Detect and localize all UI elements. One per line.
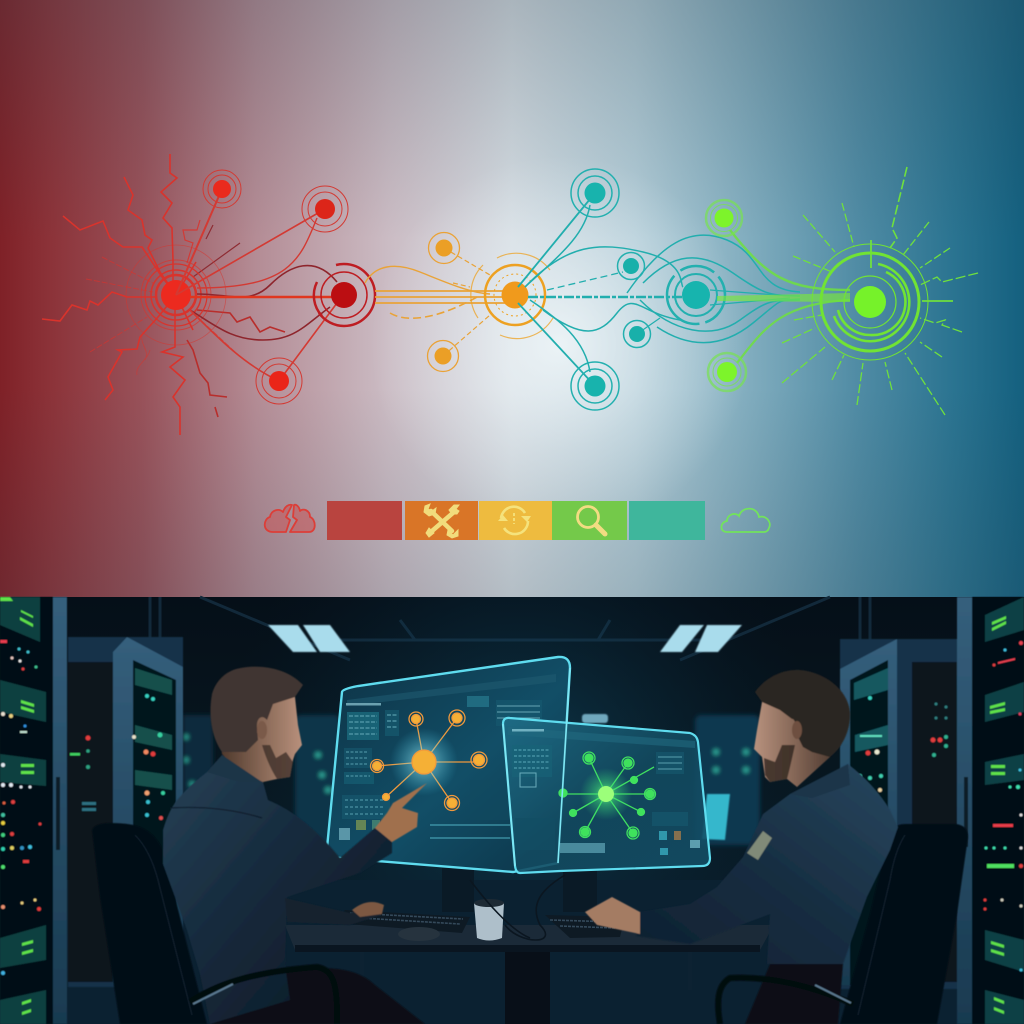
teal nodes bbox=[571, 169, 725, 410]
lime connectors and rays bbox=[717, 167, 978, 415]
hair bbox=[755, 670, 850, 757]
hand on keyboard bbox=[585, 897, 640, 934]
dark red node bbox=[314, 264, 375, 326]
coffee cup bbox=[474, 899, 504, 940]
neck and face bbox=[218, 697, 302, 782]
orange connectors bbox=[365, 248, 515, 356]
left holographic screen bbox=[327, 657, 570, 872]
icon: broken cloud bbox=[265, 505, 315, 532]
beard bbox=[764, 745, 795, 782]
desk cables bbox=[470, 875, 565, 940]
right chair bbox=[840, 824, 968, 1024]
small orange nodes bbox=[428, 232, 460, 372]
lime satellite nodes bbox=[706, 200, 746, 391]
legs bbox=[745, 964, 843, 1024]
shirt yoke seam bbox=[170, 807, 262, 818]
monitor stands bbox=[442, 868, 597, 912]
legs bbox=[200, 968, 425, 1024]
status bar bbox=[327, 501, 705, 540]
left server racks bbox=[0, 597, 183, 1024]
ear bbox=[792, 721, 802, 739]
small back monitor bbox=[702, 794, 730, 840]
left armrest bbox=[190, 967, 337, 1024]
icon: refresh arrows bbox=[498, 507, 531, 534]
lime hub bbox=[812, 244, 928, 360]
failure hub with cracks bbox=[42, 154, 285, 435]
right holographic screen bbox=[503, 668, 710, 873]
left chair bbox=[92, 823, 207, 1024]
icon: magnifier bbox=[578, 506, 605, 534]
rear rack bbox=[840, 639, 957, 989]
screen 2 data panels bbox=[508, 727, 700, 855]
right technician bbox=[585, 670, 968, 1024]
rear rack bbox=[68, 637, 183, 987]
panel: network recovery diagram bbox=[0, 0, 1024, 597]
torso and arm bbox=[636, 764, 898, 964]
lower arm bbox=[285, 898, 382, 925]
orange hub bbox=[471, 253, 553, 339]
ceiling lights bbox=[268, 625, 742, 723]
beard bbox=[262, 745, 293, 779]
overlapping screen glass edges bbox=[503, 668, 570, 866]
icon: crossed wrenches bbox=[424, 504, 459, 538]
panel: data center scene bbox=[0, 597, 1024, 1024]
screen 2 green network bbox=[559, 752, 656, 839]
teal connectors bbox=[518, 193, 800, 386]
front rack bbox=[0, 597, 67, 1024]
pointing hand bbox=[375, 783, 427, 842]
left technician bbox=[92, 667, 427, 1024]
icon: healthy cloud bbox=[721, 509, 770, 532]
hair bbox=[210, 667, 303, 752]
distant racks bbox=[183, 715, 760, 850]
gradient background bbox=[0, 0, 1024, 597]
right armrest bbox=[718, 978, 853, 1024]
right server racks bbox=[840, 597, 1024, 1024]
screen 1 data panels bbox=[339, 674, 556, 840]
keyboards and mouse bbox=[335, 910, 625, 941]
room background bbox=[0, 597, 1024, 1024]
screen 1 orange network bbox=[370, 710, 487, 810]
torso and arm bbox=[163, 755, 392, 1024]
neck and face bbox=[754, 700, 845, 787]
ear bbox=[257, 721, 267, 739]
collar bbox=[790, 764, 850, 798]
desk bbox=[285, 925, 770, 1024]
shoulder patch bbox=[747, 831, 772, 860]
front rack bbox=[957, 597, 1024, 1024]
resting hand bbox=[352, 902, 384, 917]
red satellite nodes and connectors bbox=[176, 170, 348, 404]
